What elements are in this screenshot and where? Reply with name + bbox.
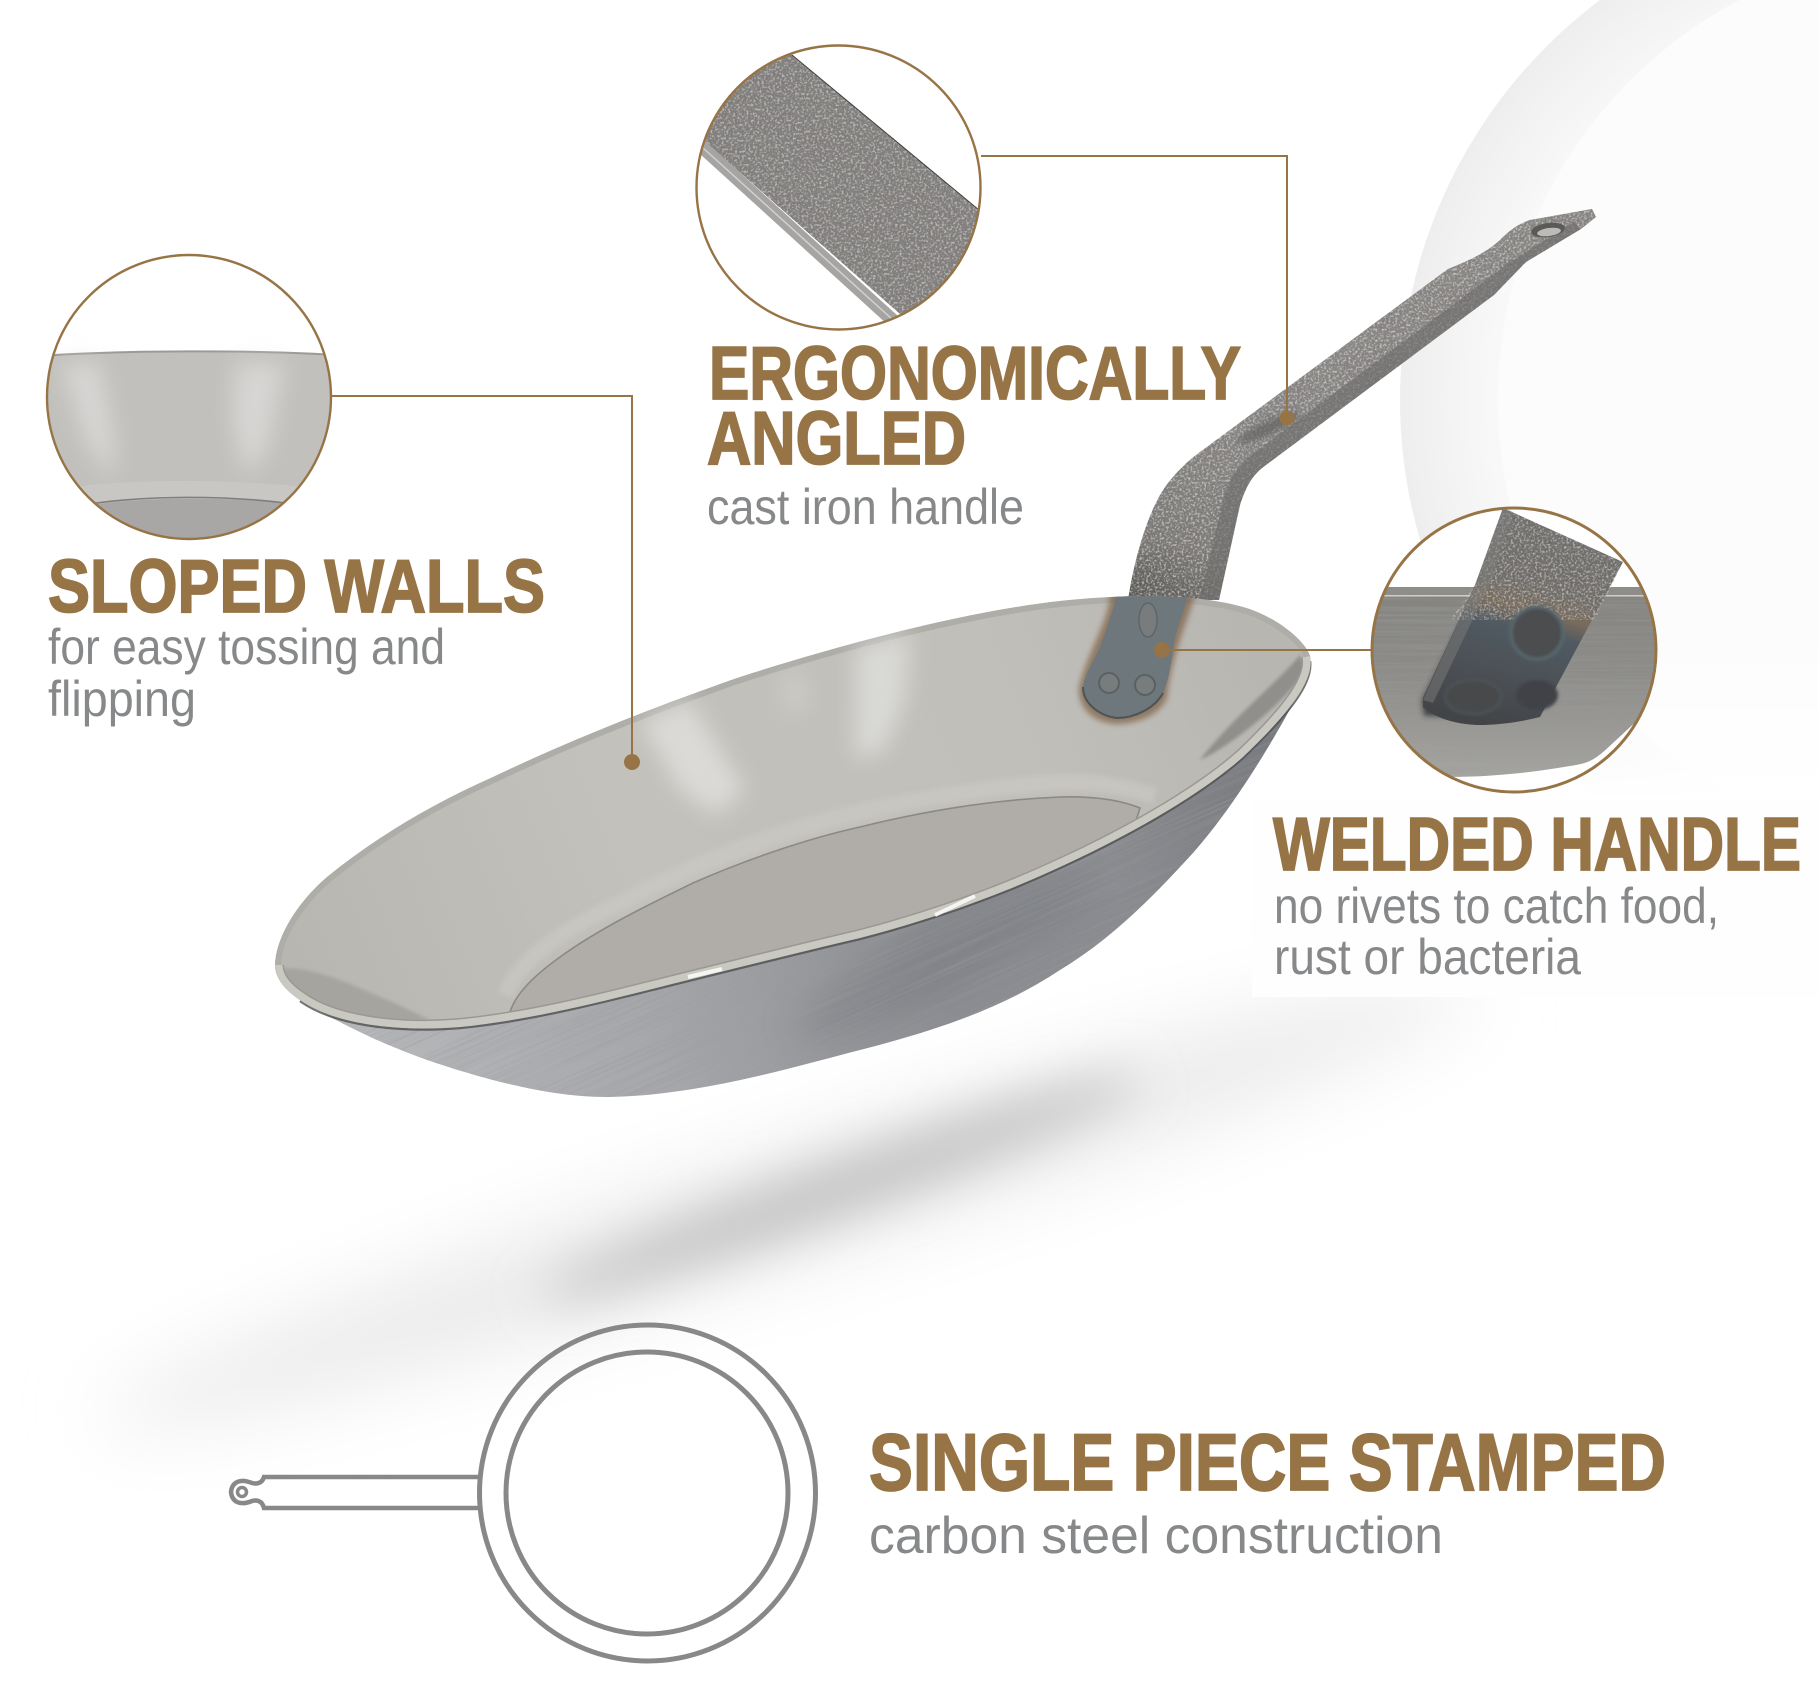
pan outer wall: [320, 702, 1294, 1097]
lighter band around floor: [505, 782, 1155, 995]
leader line: welded handle: [1154, 642, 1372, 658]
inset circle: ergonomically angled handle: [690, 40, 990, 340]
pan floor: [510, 797, 1140, 1020]
pan handle: [1120, 200, 1600, 600]
inset circle: welded handle: [1360, 500, 1670, 792]
text block: ergonomically angled: [707, 331, 1241, 535]
icon: pan outline: [231, 1325, 816, 1661]
text block: welded handle: rust or bacteria: [1274, 929, 1581, 985]
left shaded wedge: [282, 968, 427, 1020]
leader line: sloped walls: [331, 396, 640, 770]
pan illustration: [0, 200, 1643, 1641]
subtext: cast iron handle: [707, 479, 1024, 535]
text block: single piece stamped: [869, 1418, 1666, 1565]
text block: welded handle: [1273, 802, 1801, 985]
inset circle: sloped walls: [40, 255, 335, 545]
text block: sloped walls: flipping: [48, 671, 196, 727]
pan interior: [275, 596, 1310, 1020]
pan rim: [275, 656, 1311, 1030]
right shaded crescent: [1200, 655, 1306, 760]
subtext: no rivets to catch food,: [1274, 878, 1719, 934]
pan shadow: [86, 800, 1818, 1477]
background plate: [1380, 0, 1818, 920]
subtext: carbon steel construction: [869, 1507, 1443, 1565]
heading: ERGONOMICALLY: [709, 331, 1241, 415]
heading: SLOPED WALLS: [48, 544, 545, 628]
text block: ergonomically angled: ANGLED: [707, 396, 966, 480]
welded strap inside pan: [1079, 592, 1196, 724]
subtext: for easy tossing and: [48, 619, 445, 675]
leader line: ergonomically angled: [981, 156, 1294, 426]
wall highlights: [640, 632, 910, 815]
upper edge band: [275, 596, 1310, 965]
text block: sloped walls: [48, 544, 545, 727]
